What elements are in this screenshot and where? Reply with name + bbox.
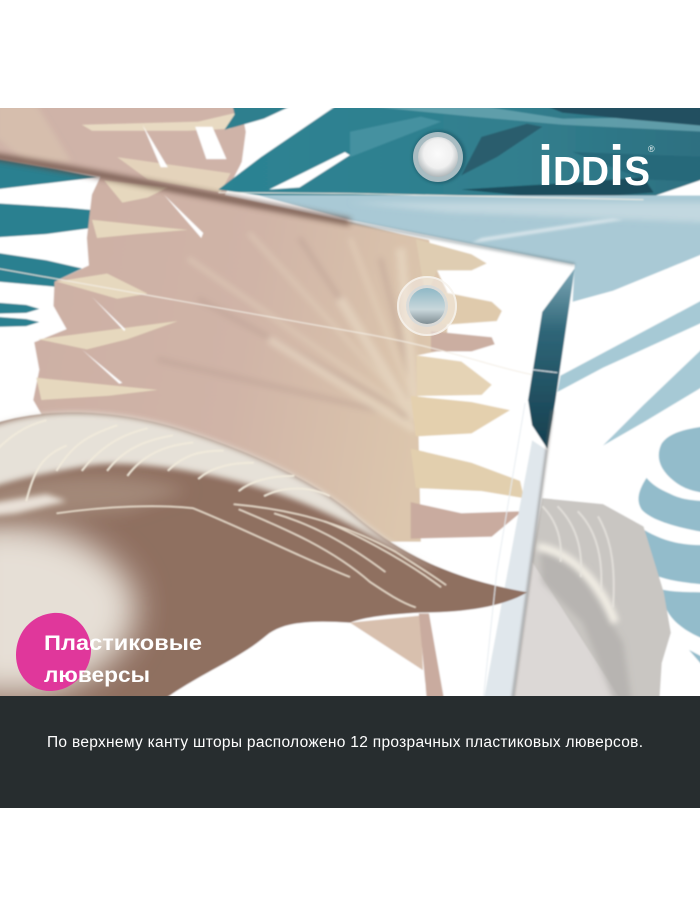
registered mark: ® bbox=[648, 144, 655, 154]
dark teal corner fold bbox=[528, 268, 575, 449]
pale hem shading bbox=[482, 440, 547, 712]
grommet: top metallic-look eyelet bbox=[412, 130, 466, 184]
fan ribs bbox=[192, 236, 416, 431]
grommet: front clear plastic eyelet bbox=[397, 276, 457, 336]
teal leaves on front panel bbox=[0, 158, 96, 328]
dark caption band bbox=[0, 696, 700, 808]
pale underside of leaf bbox=[0, 524, 136, 693]
cream streaks on fan leaf bbox=[36, 180, 188, 400]
pinkish lit area of leaf bbox=[0, 476, 188, 521]
shadow along front curtain fold bbox=[0, 155, 350, 222]
back curtain: monstera leaf bbox=[638, 426, 700, 664]
pink accent blob bbox=[16, 613, 91, 691]
feature heading: люверсы bbox=[44, 663, 150, 687]
front curtain panel bbox=[0, 157, 575, 712]
feature heading bbox=[44, 631, 202, 687]
pale stem and lower frond bbox=[350, 616, 423, 670]
midrib lines bbox=[57, 504, 446, 607]
right side fronds bbox=[411, 239, 524, 539]
thin fold shadow bbox=[511, 410, 552, 712]
lower pale strip near midrib bbox=[0, 494, 67, 516]
white slits on fan leaf bbox=[82, 195, 203, 384]
brand logo: iDDiS bbox=[538, 134, 650, 198]
photo: shower curtain fabric bbox=[0, 96, 700, 712]
seam stitches bbox=[0, 193, 643, 696]
back curtain: top hem with palm print bbox=[0, 108, 700, 196]
blush palm fan leaf bbox=[33, 173, 447, 542]
caption text: По верхнему канту шторы расположено 12 прозрачных пластиковых люверсов. bbox=[47, 734, 643, 751]
pale top band of leaf bbox=[0, 413, 441, 572]
feather lines bbox=[0, 420, 330, 501]
large brown leaf bbox=[0, 412, 527, 712]
back curtain: pale blue palm fronds bbox=[261, 194, 700, 447]
feature heading: Пластиковые bbox=[44, 631, 202, 655]
back curtain: grey shadowed leaf bbox=[514, 498, 672, 696]
